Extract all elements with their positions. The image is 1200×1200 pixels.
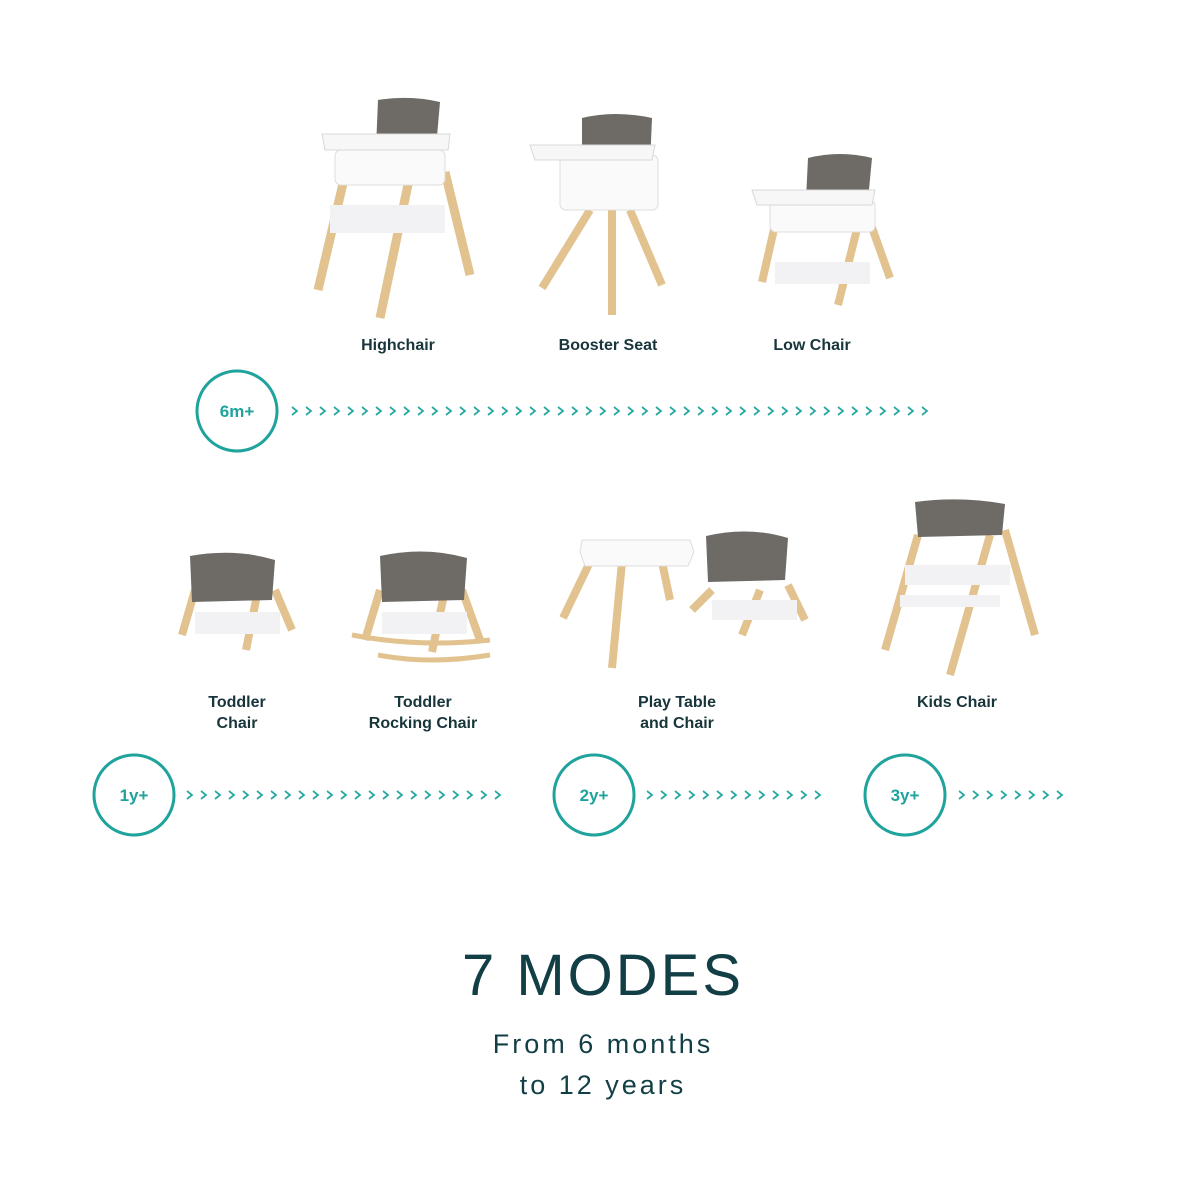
label: Toddler Rocking Chair: Rocking Chair	[369, 715, 477, 732]
subtitle: From 6 months	[493, 1029, 713, 1059]
badge: 6m+	[197, 371, 277, 451]
subtitle: to 12 years	[520, 1070, 686, 1100]
chair: kids chair	[885, 499, 1035, 675]
badge: 6m+: 6m+	[220, 402, 254, 421]
arrow: 3y+ chevrons	[955, 788, 1067, 802]
badge: 3y+: 3y+	[891, 786, 919, 805]
label: Toddler Chair: Toddler	[208, 694, 266, 711]
badge: 1y+: 1y+	[120, 786, 148, 805]
chair: low chair	[752, 154, 890, 305]
badge: 2y+: 2y+	[580, 786, 608, 805]
label: Play Table and Chair: and Chair	[640, 715, 714, 732]
label: Highchair: Highchair	[361, 337, 435, 354]
arrow: 2y+ chevrons	[643, 788, 825, 802]
chair: booster seat	[530, 114, 662, 315]
label: Toddler Chair: Chair	[217, 715, 257, 732]
label: Toddler Rocking Chair: Toddler	[394, 694, 452, 711]
label: Kids Chair: Kids Chair	[917, 694, 997, 711]
arrow: 1y+ chevrons	[183, 788, 505, 802]
chair: toddler rocking chair	[352, 551, 490, 660]
badge: 1y+	[94, 755, 174, 835]
title: 7 MODES	[462, 943, 744, 1008]
arrow: 6m+ chevrons	[288, 404, 932, 418]
label: Low Chair: Low Chair	[773, 337, 851, 354]
label: Play Table and Chair: Play Table	[638, 694, 716, 711]
chair: toddler chair	[182, 553, 292, 650]
badge: 3y+	[865, 755, 945, 835]
badge: 2y+	[554, 755, 634, 835]
chair: highchair	[318, 98, 470, 318]
chair: play table and chair	[563, 531, 805, 668]
label: Booster Seat: Booster Seat	[559, 337, 658, 354]
